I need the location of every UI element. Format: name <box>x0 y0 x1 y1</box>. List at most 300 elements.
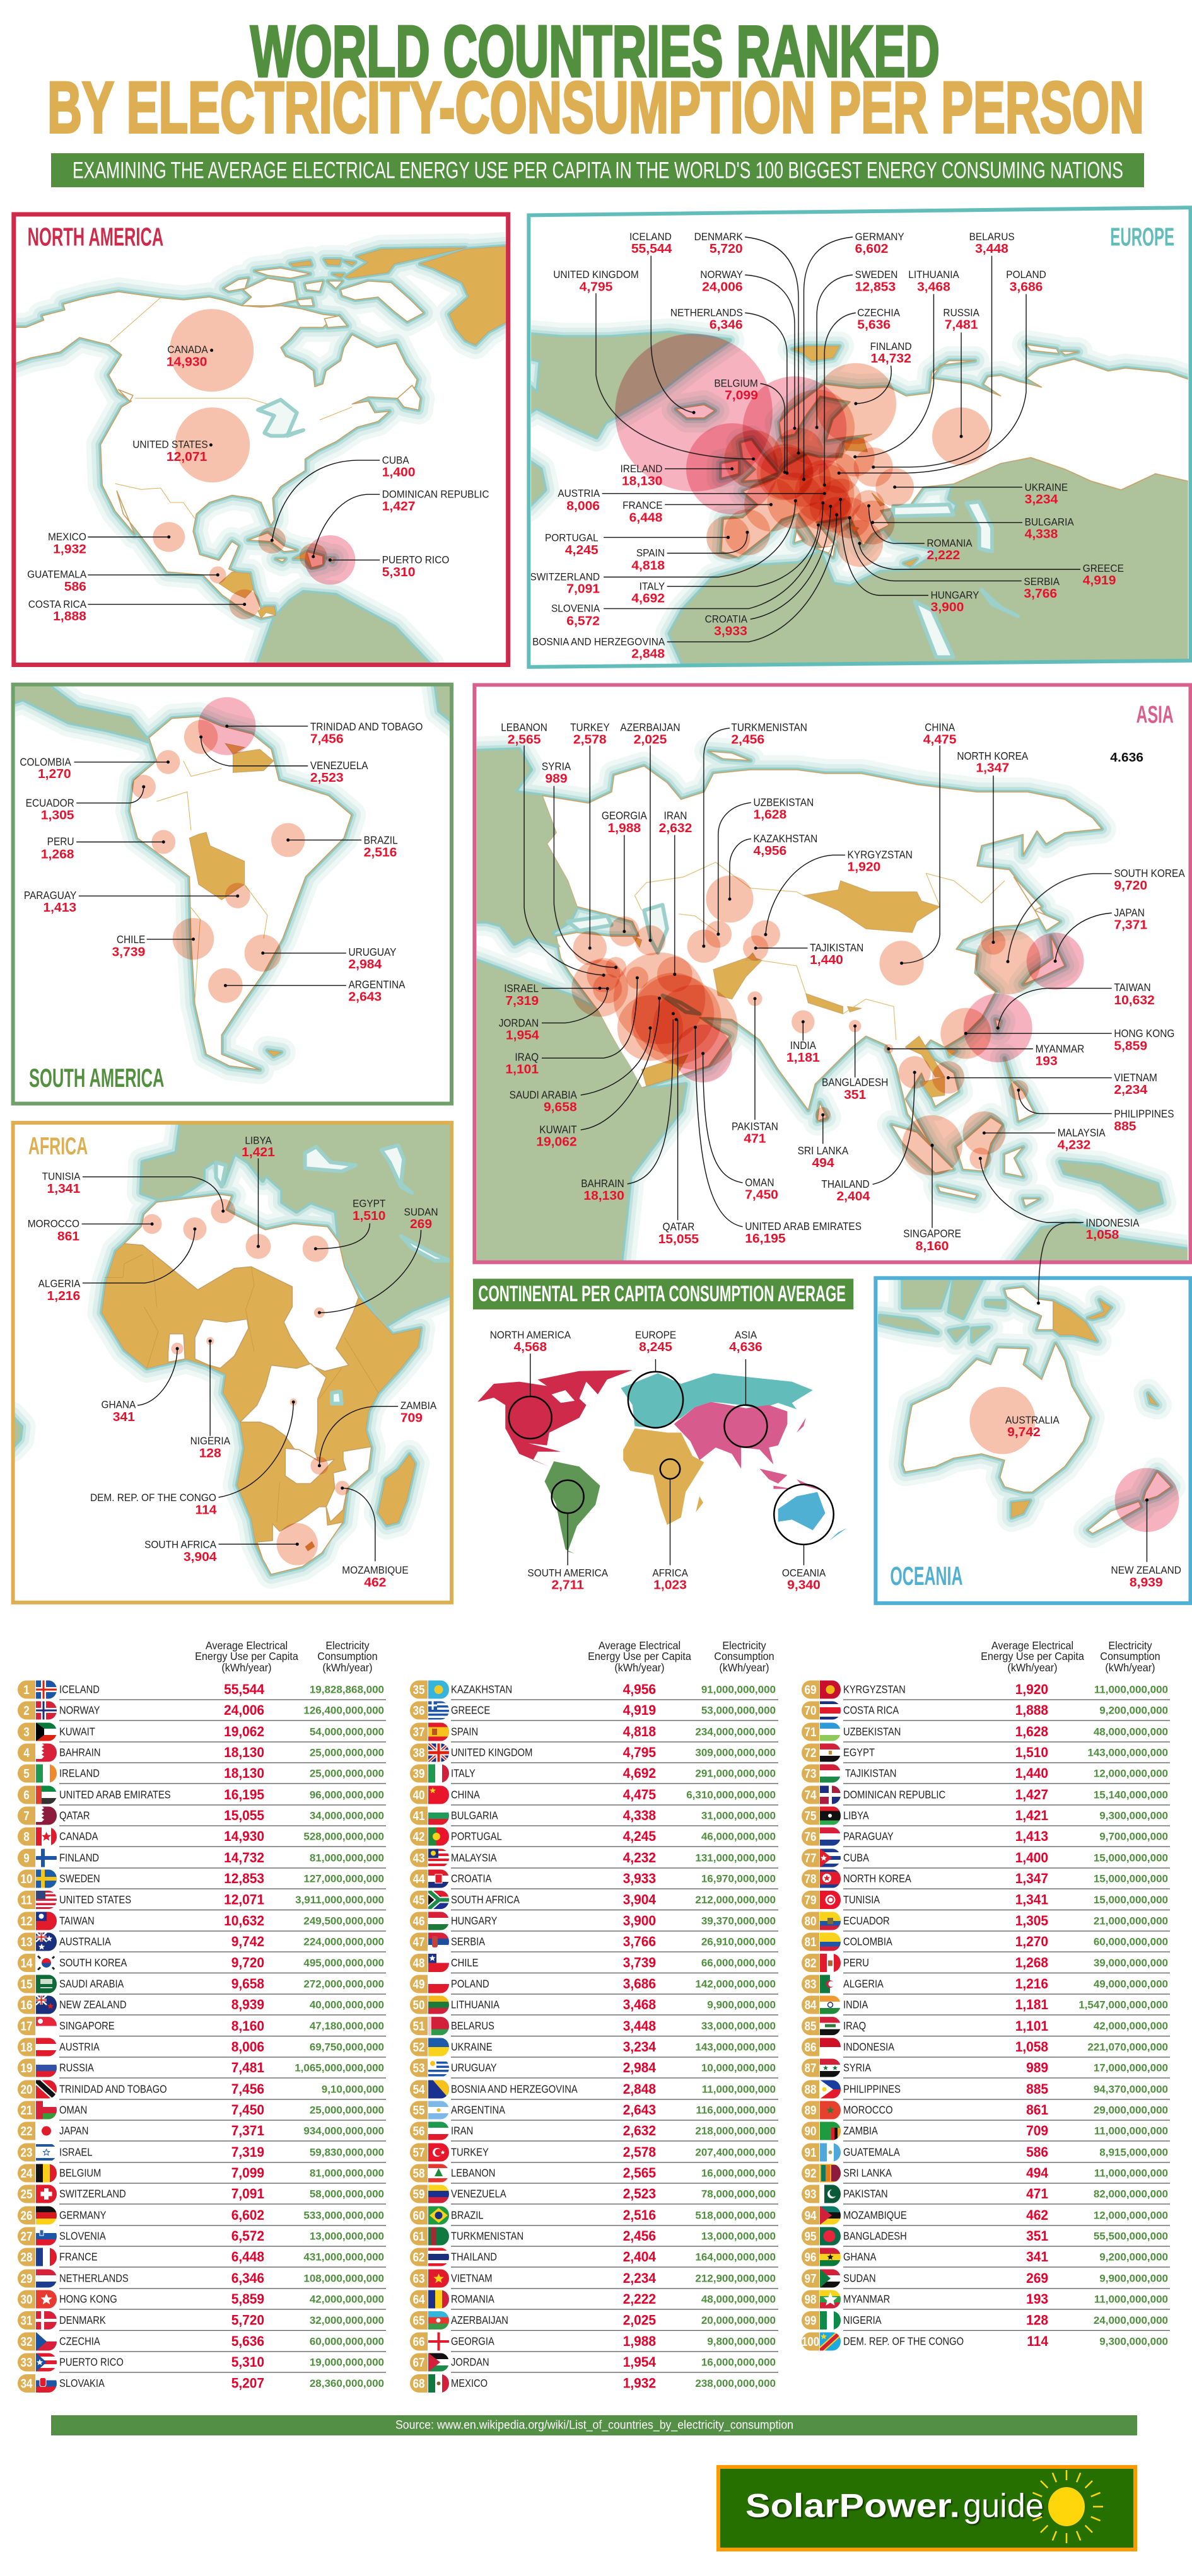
callout: Malaysia: 4,232 <box>1058 1138 1090 1152</box>
callout: Georgia: GEORGIA <box>602 810 647 822</box>
callout: Bahrain: 18,130 <box>583 1189 624 1203</box>
row 82: 39,000,000,000 <box>1094 1957 1168 1969</box>
row 38: UNITED KINGDOM <box>451 1746 532 1759</box>
row 68: 238,000,000,000 <box>695 2377 776 2389</box>
row 29 <box>18 2269 386 2289</box>
row 38: 309,000,000,000 <box>695 1746 776 1759</box>
row 5 <box>18 1764 386 1784</box>
row 1: 55,544 <box>224 1682 264 1697</box>
row 46: 3,900 <box>623 1913 656 1929</box>
row 40 <box>410 1785 778 1805</box>
callout: Saudi Arabia: SAUDI ARABIA <box>510 1089 577 1101</box>
callout: Lebanon: LEBANON <box>501 722 547 734</box>
row 35 <box>410 1680 778 1700</box>
row 20: 7,456 <box>231 2082 264 2097</box>
callout: Sri Lanka: SRI LANKA <box>798 1145 848 1157</box>
row 7: 15,055 <box>224 1808 264 1823</box>
callout: Thailand <box>821 1056 931 1204</box>
row 55: 55 <box>413 2103 424 2117</box>
row 27 <box>18 2227 386 2246</box>
callout: Nigeria: 128 <box>199 1446 221 1460</box>
table headers column 2 <box>588 1639 774 1674</box>
callout: Vietnam: VIETNAM <box>1114 1072 1157 1084</box>
callout: Sri Lanka <box>798 1107 848 1170</box>
table headers column 3: (kWh/year) <box>1105 1661 1155 1674</box>
callout: Morocco <box>28 1214 162 1244</box>
row 36 <box>410 1701 778 1720</box>
row 27: 27 <box>21 2229 32 2243</box>
panel: South America: SOUTH AMERICA <box>29 1063 164 1093</box>
table headers column 2: Energy Use per Capita <box>588 1650 691 1662</box>
callout: Thailand: THAILAND <box>821 1178 870 1190</box>
row 66 <box>410 2332 778 2352</box>
row 95 <box>802 2227 1170 2246</box>
callout: Colombia <box>20 750 180 781</box>
row 58: 16,000,000,000 <box>701 2167 776 2179</box>
row 6 <box>18 1785 386 1805</box>
row 98: MYANMAR <box>843 2293 890 2306</box>
callout: Austria <box>558 463 854 523</box>
callout: Bangladesh: 351 <box>844 1088 866 1102</box>
callout: Azerbaijan: 2,025 <box>634 733 667 747</box>
row 64: 48,000,000,000 <box>701 2294 776 2305</box>
row 62: 62 <box>413 2250 424 2264</box>
row 86 <box>802 2038 1170 2057</box>
row 96: GHANA <box>843 2251 876 2263</box>
row 5: IRELAND <box>59 1767 100 1780</box>
row 72: 72 <box>805 1746 816 1760</box>
callout: Iceland: 55,544 <box>631 242 672 256</box>
callout: Portugal: 4,245 <box>565 543 599 557</box>
row 70: 70 <box>805 1703 816 1717</box>
row 65: 65 <box>413 2313 424 2328</box>
row 94: 12,000,000,000 <box>1094 2209 1168 2222</box>
callout: South Africa <box>144 1523 318 1565</box>
callout: Greece <box>836 520 1124 588</box>
row 12 <box>18 1912 386 1931</box>
callout: Kazakhstan: 4,956 <box>754 844 786 858</box>
row 38: 4,795 <box>623 1745 656 1760</box>
row 90: ZAMBIA <box>843 2125 878 2137</box>
callout: Singapore: 8,160 <box>916 1239 949 1253</box>
row 5: 18,130 <box>224 1766 264 1781</box>
row 76 <box>802 1827 1170 1847</box>
callout: Tajikistan: 1,440 <box>810 953 843 967</box>
row 34: SLOVAKIA <box>59 2377 105 2389</box>
callout: Bosnia and Herzegovina <box>532 497 855 661</box>
callout: Europe average: EUROPE <box>635 1329 676 1341</box>
row 61: TURKMENISTAN <box>451 2230 523 2242</box>
callout: North Korea: NORTH KOREA <box>957 750 1028 762</box>
row 96 <box>802 2248 1170 2267</box>
row 66: 1,988 <box>623 2334 656 2349</box>
row 93: 471 <box>1026 2186 1048 2202</box>
callout: Oman: OMAN <box>745 1177 774 1189</box>
row 100: DEM. REP. OF THE CONGO <box>843 2335 964 2348</box>
row 45 <box>410 1890 778 1910</box>
callout: Hong Kong <box>940 1008 1174 1059</box>
callout: New Zealand: NEW ZEALAND <box>1111 1564 1181 1576</box>
callout: North America average: NORTH AMERICA <box>490 1329 571 1341</box>
row 64 <box>410 2290 778 2309</box>
callout: Switzerland: SWITZERLAND <box>530 571 600 583</box>
row 56: 56 <box>413 2124 424 2138</box>
callout: Italy: 4,692 <box>631 591 665 605</box>
row 91 <box>802 2143 1170 2162</box>
callout: Azerbaijan <box>620 722 681 955</box>
row 76: 9,700,000,000 <box>1099 1831 1168 1842</box>
callout: Venezuela: 2,523 <box>310 771 344 785</box>
row 19: 7,481 <box>231 2060 264 2075</box>
row 50: LITHUANIA <box>451 1999 500 2011</box>
callout: Dominican Republic: 1,427 <box>382 499 415 513</box>
row 63: 2,234 <box>623 2271 656 2286</box>
row 67: 16,000,000,000 <box>701 2357 776 2368</box>
callout: Europe average: 8,245 <box>639 1340 672 1354</box>
callout: Ecuador <box>26 775 156 823</box>
callout: Serbia: 3,766 <box>1024 586 1057 601</box>
callout: Ireland: IRELAND <box>620 463 662 475</box>
row 74: 74 <box>805 1788 817 1802</box>
callout: Greece: GREECE <box>1083 562 1124 574</box>
callout: Vietnam: 2,234 <box>1114 1082 1148 1097</box>
row 17: 17 <box>21 2019 32 2033</box>
row 53: URUGUAY <box>451 2062 497 2074</box>
row 85: 42,000,000,000 <box>1094 2020 1168 2032</box>
row 47: SERBIA <box>451 1935 485 1948</box>
callout: Jordan: JORDAN <box>499 1018 539 1030</box>
row 85: 1,101 <box>1015 2018 1048 2034</box>
callout: Oman: 7,450 <box>745 1188 778 1202</box>
row 86: 1,058 <box>1015 2039 1048 2055</box>
row 75: 9,300,000,000 <box>1099 1809 1168 1822</box>
callout: South America average: SOUTH AMERICA <box>527 1567 608 1579</box>
callout: Ukraine: 3,234 <box>1025 492 1058 507</box>
row 83: 49,000,000,000 <box>1094 1978 1168 1990</box>
row 98: 193 <box>1026 2292 1048 2307</box>
row 49: 49 <box>413 1977 424 1991</box>
callout: Pakistan <box>732 991 778 1146</box>
row 9: 9 <box>23 1851 30 1865</box>
row 35: 35 <box>413 1683 424 1697</box>
row 52: UKRAINE <box>451 2041 493 2053</box>
row 64: 64 <box>413 2292 425 2306</box>
source bar: Source: www.en.wikipedia.org/wiki/List_of_countries_by_electricity_consumption <box>395 2418 793 2432</box>
callout: Peru <box>41 830 175 861</box>
callout: Ecuador: 1,305 <box>41 808 74 823</box>
row 41: 31,000,000,000 <box>701 1809 776 1822</box>
callout: Iraq: 1,101 <box>505 1062 539 1076</box>
callout: Uzbekistan: 1,628 <box>754 808 786 821</box>
row 60: 60 <box>413 2208 424 2222</box>
row 36: 53,000,000,000 <box>701 1705 776 1716</box>
row 43: 131,000,000,000 <box>695 1852 776 1864</box>
row 32: 32 <box>21 2335 32 2348</box>
row 89: 89 <box>805 2103 816 2117</box>
row 52 <box>410 2038 778 2057</box>
callout: Trinidad and Tobago <box>198 697 423 755</box>
row 35: 4,956 <box>623 1682 656 1697</box>
row 20: 9,10,000,000 <box>322 2083 384 2096</box>
row 80: ECUADOR <box>843 1915 890 1927</box>
row 54: 54 <box>413 2082 425 2096</box>
callout: Poland: POLAND <box>1006 269 1046 281</box>
row 23: ISRAEL <box>59 2146 92 2159</box>
callout: Portugal <box>545 516 750 559</box>
callout: Morocco: 861 <box>57 1229 79 1244</box>
row 83: ALGERIA <box>843 1978 884 1990</box>
row 59 <box>410 2184 778 2204</box>
row 68 <box>410 2374 776 2393</box>
row 43: MALAYSIA <box>451 1852 497 1864</box>
callout: Cuba: CUBA <box>382 455 409 466</box>
callout: Ireland <box>620 423 778 514</box>
row 82: PERU <box>843 1957 869 1969</box>
callout: Costa Rica <box>28 589 260 624</box>
callout: Costa Rica: COSTA RICA <box>28 598 86 610</box>
row 8: 8 <box>23 1830 30 1843</box>
row 79: 15,000,000,000 <box>1094 1894 1168 1906</box>
row 73: 1,440 <box>1015 1766 1048 1781</box>
row 7 <box>18 1806 386 1826</box>
row 70 <box>802 1701 1170 1720</box>
row 26: GERMANY <box>59 2209 107 2222</box>
row 85 <box>802 2017 1170 2036</box>
row 75: LIBYA <box>843 1809 869 1822</box>
callout: Japan: JAPAN <box>1114 907 1145 919</box>
row 67 <box>410 2353 778 2372</box>
row 51: BELARUS <box>451 2020 494 2032</box>
row 16 <box>18 1995 386 2015</box>
row 39 <box>410 1764 778 1784</box>
callout: Mozambique: MOZAMBIQUE <box>342 1564 409 1576</box>
row 5: 5 <box>23 1767 30 1780</box>
row 80 <box>802 1912 1170 1931</box>
row 4 <box>18 1743 386 1763</box>
callout: China: CHINA <box>925 722 955 734</box>
callout: Brazil <box>271 823 398 859</box>
callout: Taiwan: 10,632 <box>1114 993 1155 1007</box>
callout: Finland <box>815 340 912 444</box>
panel: Oceania <box>875 1278 1191 1603</box>
row 81: COLOMBIA <box>843 1935 892 1948</box>
callout: Ghana: GHANA <box>101 1399 136 1411</box>
callout: Syria <box>542 761 626 978</box>
callout: Venezuela: VENEZUELA <box>310 760 368 772</box>
callout: Indonesia: INDONESIA <box>1086 1217 1139 1229</box>
row 57: 57 <box>413 2145 424 2159</box>
row 34 <box>18 2374 384 2393</box>
row 92: 494 <box>1026 2166 1048 2181</box>
row 71: 71 <box>805 1725 816 1739</box>
row 48 <box>410 1953 778 1973</box>
callout: Turkmenistan: 2,456 <box>731 733 764 747</box>
row 52: 52 <box>413 2040 424 2054</box>
row 91: GUATEMALA <box>843 2146 900 2159</box>
callout: Uzbekistan: UZBEKISTAN <box>754 797 814 809</box>
callout: Sudan: SUDAN <box>404 1206 438 1218</box>
row 67: 67 <box>413 2355 424 2369</box>
row 6: UNITED ARAB EMIRATES <box>59 1789 171 1801</box>
row 4: BAHRAIN <box>59 1746 101 1759</box>
row 49 <box>410 1975 778 1994</box>
row 26: 26 <box>21 2208 32 2222</box>
callout: Morocco: MOROCCO <box>28 1218 79 1230</box>
row 77: CUBA <box>843 1852 869 1864</box>
callout: Australia: AUSTRALIA <box>1005 1414 1060 1426</box>
callout: Malaysia: MALAYSIA <box>1058 1127 1106 1139</box>
callout: Croatia <box>705 485 851 638</box>
row 57: 2,578 <box>623 2145 656 2160</box>
table headers column 1: Consumption <box>317 1650 378 1662</box>
row 5: 25,000,000,000 <box>310 1768 384 1779</box>
callout: Mexico <box>48 522 185 557</box>
callout: Spain: SPAIN <box>636 547 665 559</box>
callout: Sweden: 12,853 <box>855 280 896 294</box>
callout: Kyrgyzstan: 1,920 <box>848 860 880 874</box>
row 89: MOROCCO <box>843 2104 893 2116</box>
row 19: RUSSIA <box>59 2062 94 2074</box>
callout: Iran: IRAN <box>664 810 687 822</box>
row 51 <box>410 2017 778 2036</box>
row 60: BRAZIL <box>451 2209 484 2222</box>
callout: Iran: 2,632 <box>659 821 692 835</box>
callout: Germany: GERMANY <box>855 231 904 243</box>
source bar <box>51 2415 1137 2435</box>
row 99: 99 <box>805 2313 816 2328</box>
callout: Italy <box>631 502 841 605</box>
callout: Turkey: 2,578 <box>573 733 607 747</box>
callout: United Kingdom: 4,795 <box>580 280 612 294</box>
row 53: 10,000,000,000 <box>701 2062 776 2074</box>
callout: Japan <box>1027 907 1147 990</box>
callout: United States: UNITED STATES <box>132 439 208 450</box>
row 85: 85 <box>805 2019 816 2033</box>
row 44: 16,970,000,000 <box>701 1872 776 1885</box>
callout: Jordan <box>499 974 622 1042</box>
row 36: 4,919 <box>623 1703 656 1718</box>
row 9: FINLAND <box>59 1852 99 1864</box>
callout: United States: 12,071 <box>167 450 207 464</box>
callout: Oman <box>674 1024 778 1202</box>
row 30: HONG KONG <box>59 2293 117 2306</box>
callout: Canada: 14,930 <box>167 355 207 369</box>
row 74 <box>802 1785 1170 1805</box>
row 51: 3,448 <box>623 2018 656 2034</box>
row 84: INDIA <box>843 1999 868 2011</box>
row 11: UNITED STATES <box>59 1894 131 1906</box>
row 52: 3,234 <box>623 2039 656 2055</box>
row 20 <box>18 2080 386 2099</box>
row 66: GEORGIA <box>451 2335 494 2348</box>
callout: Ukraine: UKRAINE <box>1025 482 1068 494</box>
callout: Egypt: 1,510 <box>353 1209 385 1223</box>
row 70: COSTA RICA <box>843 1704 899 1717</box>
callout: Ecuador: ECUADOR <box>26 798 74 809</box>
row 44: 3,933 <box>623 1871 656 1886</box>
callout: Algeria: ALGERIA <box>38 1278 81 1290</box>
callout: Belarus: BELARUS <box>969 231 1015 243</box>
row 73 <box>802 1764 1170 1784</box>
callout: Romania: ROMANIA <box>927 538 973 549</box>
row 13: 13 <box>21 1935 32 1949</box>
callout: New Zealand <box>1111 1468 1181 1589</box>
panel: Africa <box>11 1122 455 1603</box>
row 94 <box>802 2206 1170 2225</box>
row 61: 13,000,000,000 <box>701 2231 776 2242</box>
row 88: 88 <box>805 2082 816 2096</box>
row 78: 1,347 <box>1015 1871 1048 1886</box>
row 98: 11,000,000,000 <box>1094 2294 1168 2305</box>
callout: Kuwait <box>536 953 705 1149</box>
row 84: 1,181 <box>1015 1997 1048 2012</box>
row 76: 76 <box>805 1830 816 1843</box>
row 26 <box>18 2206 386 2225</box>
callout: Egypt: EGYPT <box>353 1198 385 1209</box>
callout: Guatemala <box>27 566 226 594</box>
row 15: 272,000,000,000 <box>303 1978 384 1990</box>
row 50 <box>410 1995 778 2015</box>
row 54: 11,000,000,000 <box>702 2083 776 2096</box>
row 44: 44 <box>413 1872 425 1886</box>
row 43: 43 <box>413 1851 424 1865</box>
stray value label: 4.636 <box>1110 750 1143 765</box>
row 87: 17,000,000,000 <box>1094 2062 1168 2074</box>
table headers column 1: Energy Use per Capita <box>195 1650 298 1662</box>
callout: Denmark: 5,720 <box>710 242 743 256</box>
callout: Bulgaria: 4,338 <box>1025 527 1058 541</box>
row 4: 25,000,000,000 <box>310 1746 384 1759</box>
row 6: 96,000,000,000 <box>310 1789 384 1801</box>
row 63 <box>410 2269 778 2289</box>
row 25: SWITZERLAND <box>59 2188 126 2200</box>
callout: Myanmar: MYANMAR <box>1036 1043 1084 1055</box>
callout: Brazil: BRAZIL <box>364 835 398 846</box>
callout: Iceland <box>615 231 773 491</box>
row 19: 19 <box>21 2061 32 2075</box>
callout: Tunisia: 1,341 <box>47 1181 80 1196</box>
callout: Costa Rica: 1,888 <box>53 609 86 624</box>
callout: India: 1,181 <box>786 1050 820 1065</box>
callout: Asia average <box>725 1329 767 1448</box>
callout: Belgium: BELGIUM <box>714 378 758 390</box>
row 21 <box>18 2101 386 2120</box>
row 91: 586 <box>1026 2145 1048 2160</box>
row 88: PHILIPPINES <box>843 2083 901 2096</box>
icon: sun <box>1032 2470 1103 2543</box>
row 39: 291,000,000,000 <box>695 1768 776 1779</box>
row 99: 24,000,000,000 <box>1094 2314 1168 2326</box>
table headers column 3: Consumption <box>1100 1650 1160 1662</box>
table headers column 3: Electricity <box>1108 1639 1152 1652</box>
callout: Uruguay: URUGUAY <box>348 946 397 958</box>
row 37: 4,818 <box>623 1724 656 1739</box>
row 27: 6,572 <box>231 2229 264 2244</box>
row 24: BELGIUM <box>59 2167 101 2179</box>
callout: Zambia: ZAMBIA <box>400 1400 436 1412</box>
row 31: 32,000,000,000 <box>310 2314 384 2326</box>
callout: North America average <box>490 1329 571 1439</box>
row 8: CANADA <box>59 1830 98 1843</box>
callout: Denmark <box>694 231 824 478</box>
row 22 <box>18 2121 386 2141</box>
callout: Peru: 1,268 <box>41 847 74 861</box>
row 70: 1,888 <box>1015 1703 1048 1718</box>
callout: United States <box>132 407 250 482</box>
callout: Kyrgyzstan: KYRGYZSTAN <box>848 849 913 861</box>
callout: Sudan <box>314 1206 438 1318</box>
row 100: 100 <box>802 2335 819 2348</box>
